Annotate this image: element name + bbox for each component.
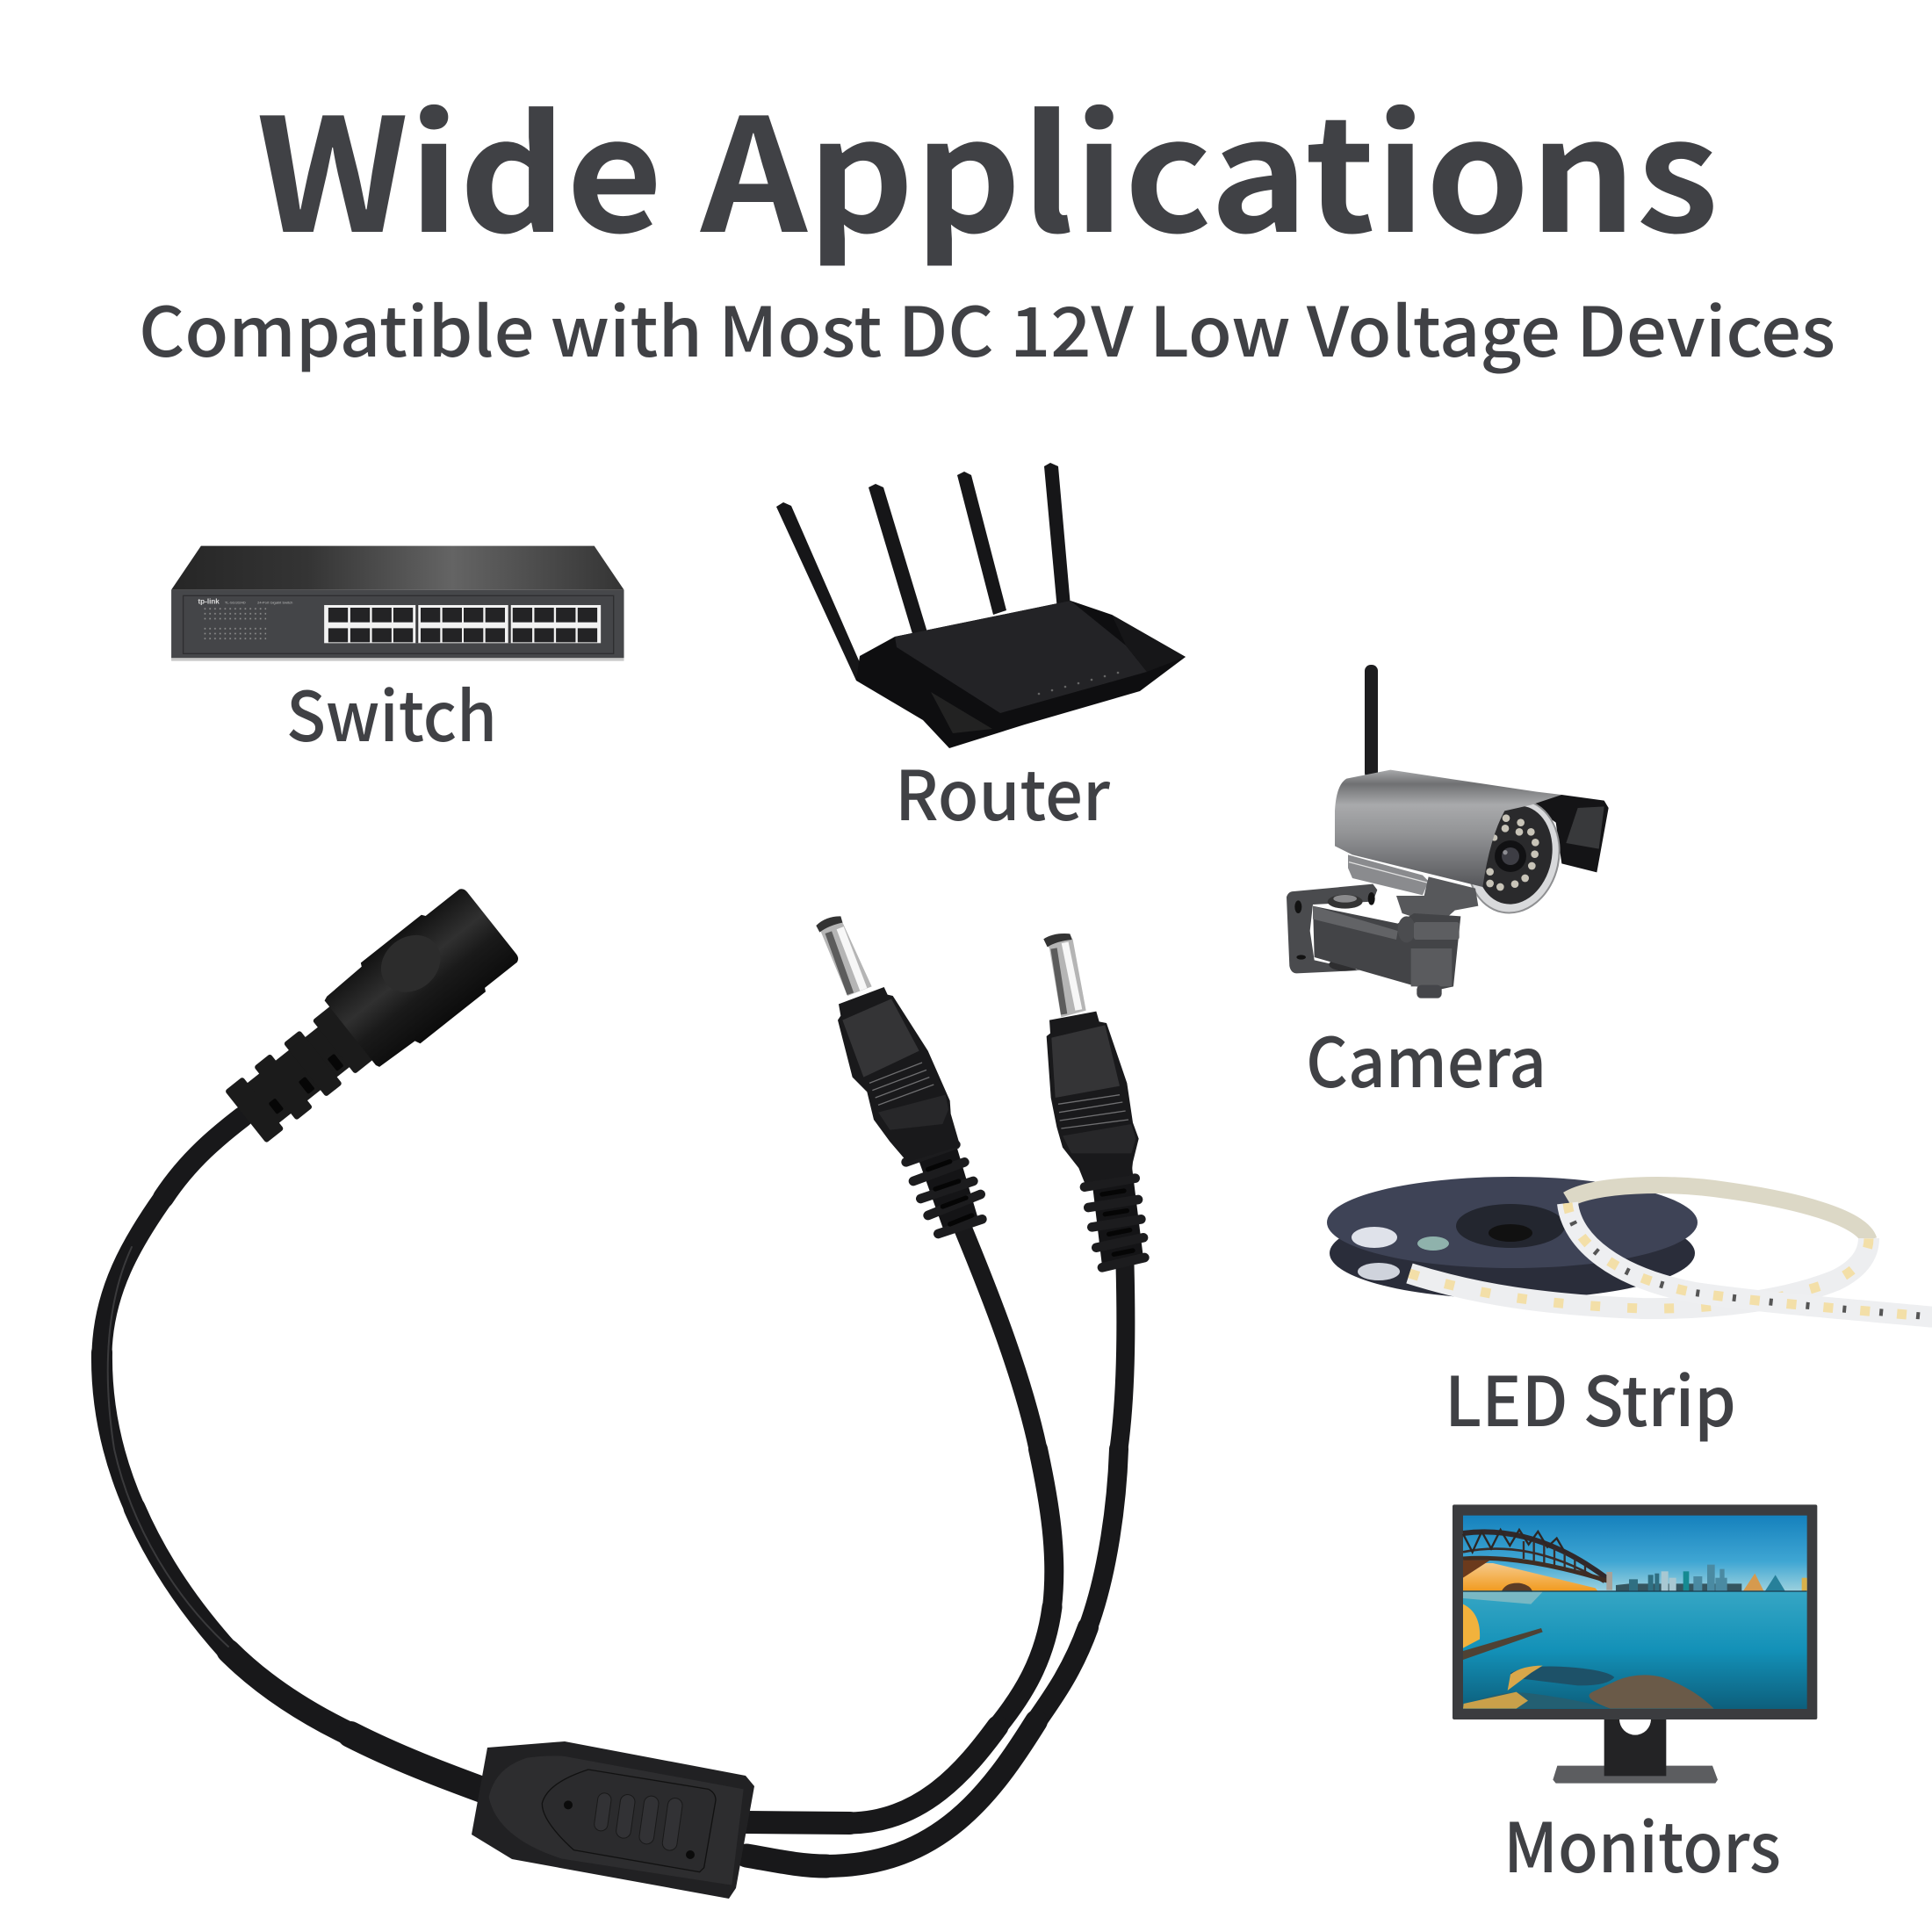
camera hood: [1531, 795, 1609, 872]
device: LED strip reel: [1327, 1177, 1932, 1317]
lens ring: [1457, 791, 1569, 921]
neck: [1396, 876, 1478, 924]
device: network switch: TL-SG1024D: [225, 601, 246, 605]
label: Camera: Camera: [1306, 1009, 1546, 1107]
male DC plug 2: [1043, 934, 1144, 1267]
device: network switch: tp-link: [198, 598, 220, 606]
arm: [1313, 906, 1460, 990]
label: Router: Router: [895, 742, 1111, 840]
device: network switch: 24-Port Gigabit Switch: [257, 601, 292, 605]
label: Monitors: Monitors: [1503, 1794, 1781, 1892]
label: Switch: Switch: [286, 663, 497, 761]
connector barrel: [321, 883, 523, 1073]
device: monitor: [1453, 1504, 1817, 1784]
device: network switch: [171, 546, 624, 661]
title: Wide Applications: [256, 49, 1719, 278]
female DC connector: [215, 883, 523, 1157]
camera barrel: [1335, 770, 1561, 887]
monitor bezel: [1453, 1504, 1817, 1719]
subtitle: Compatible with Most DC 12V Low Voltage Devices: [139, 278, 1835, 377]
male DC plug 1: [816, 916, 982, 1236]
male DC plugs (drawn in crop coordinates): [816, 916, 1144, 1267]
monitor screen scene: [1463, 1516, 1807, 1709]
wall plate: [1287, 884, 1377, 973]
strain relief: [224, 1003, 377, 1144]
Y-cable wires: [102, 1117, 1126, 1866]
Y splitter moulding: [472, 1741, 754, 1899]
label: LED Strip: LED Strip: [1445, 1348, 1736, 1446]
under rail: [1348, 854, 1429, 895]
monitor stand: [1553, 1719, 1718, 1784]
device: security camera: [1287, 665, 1609, 998]
device: router: [776, 463, 1186, 748]
